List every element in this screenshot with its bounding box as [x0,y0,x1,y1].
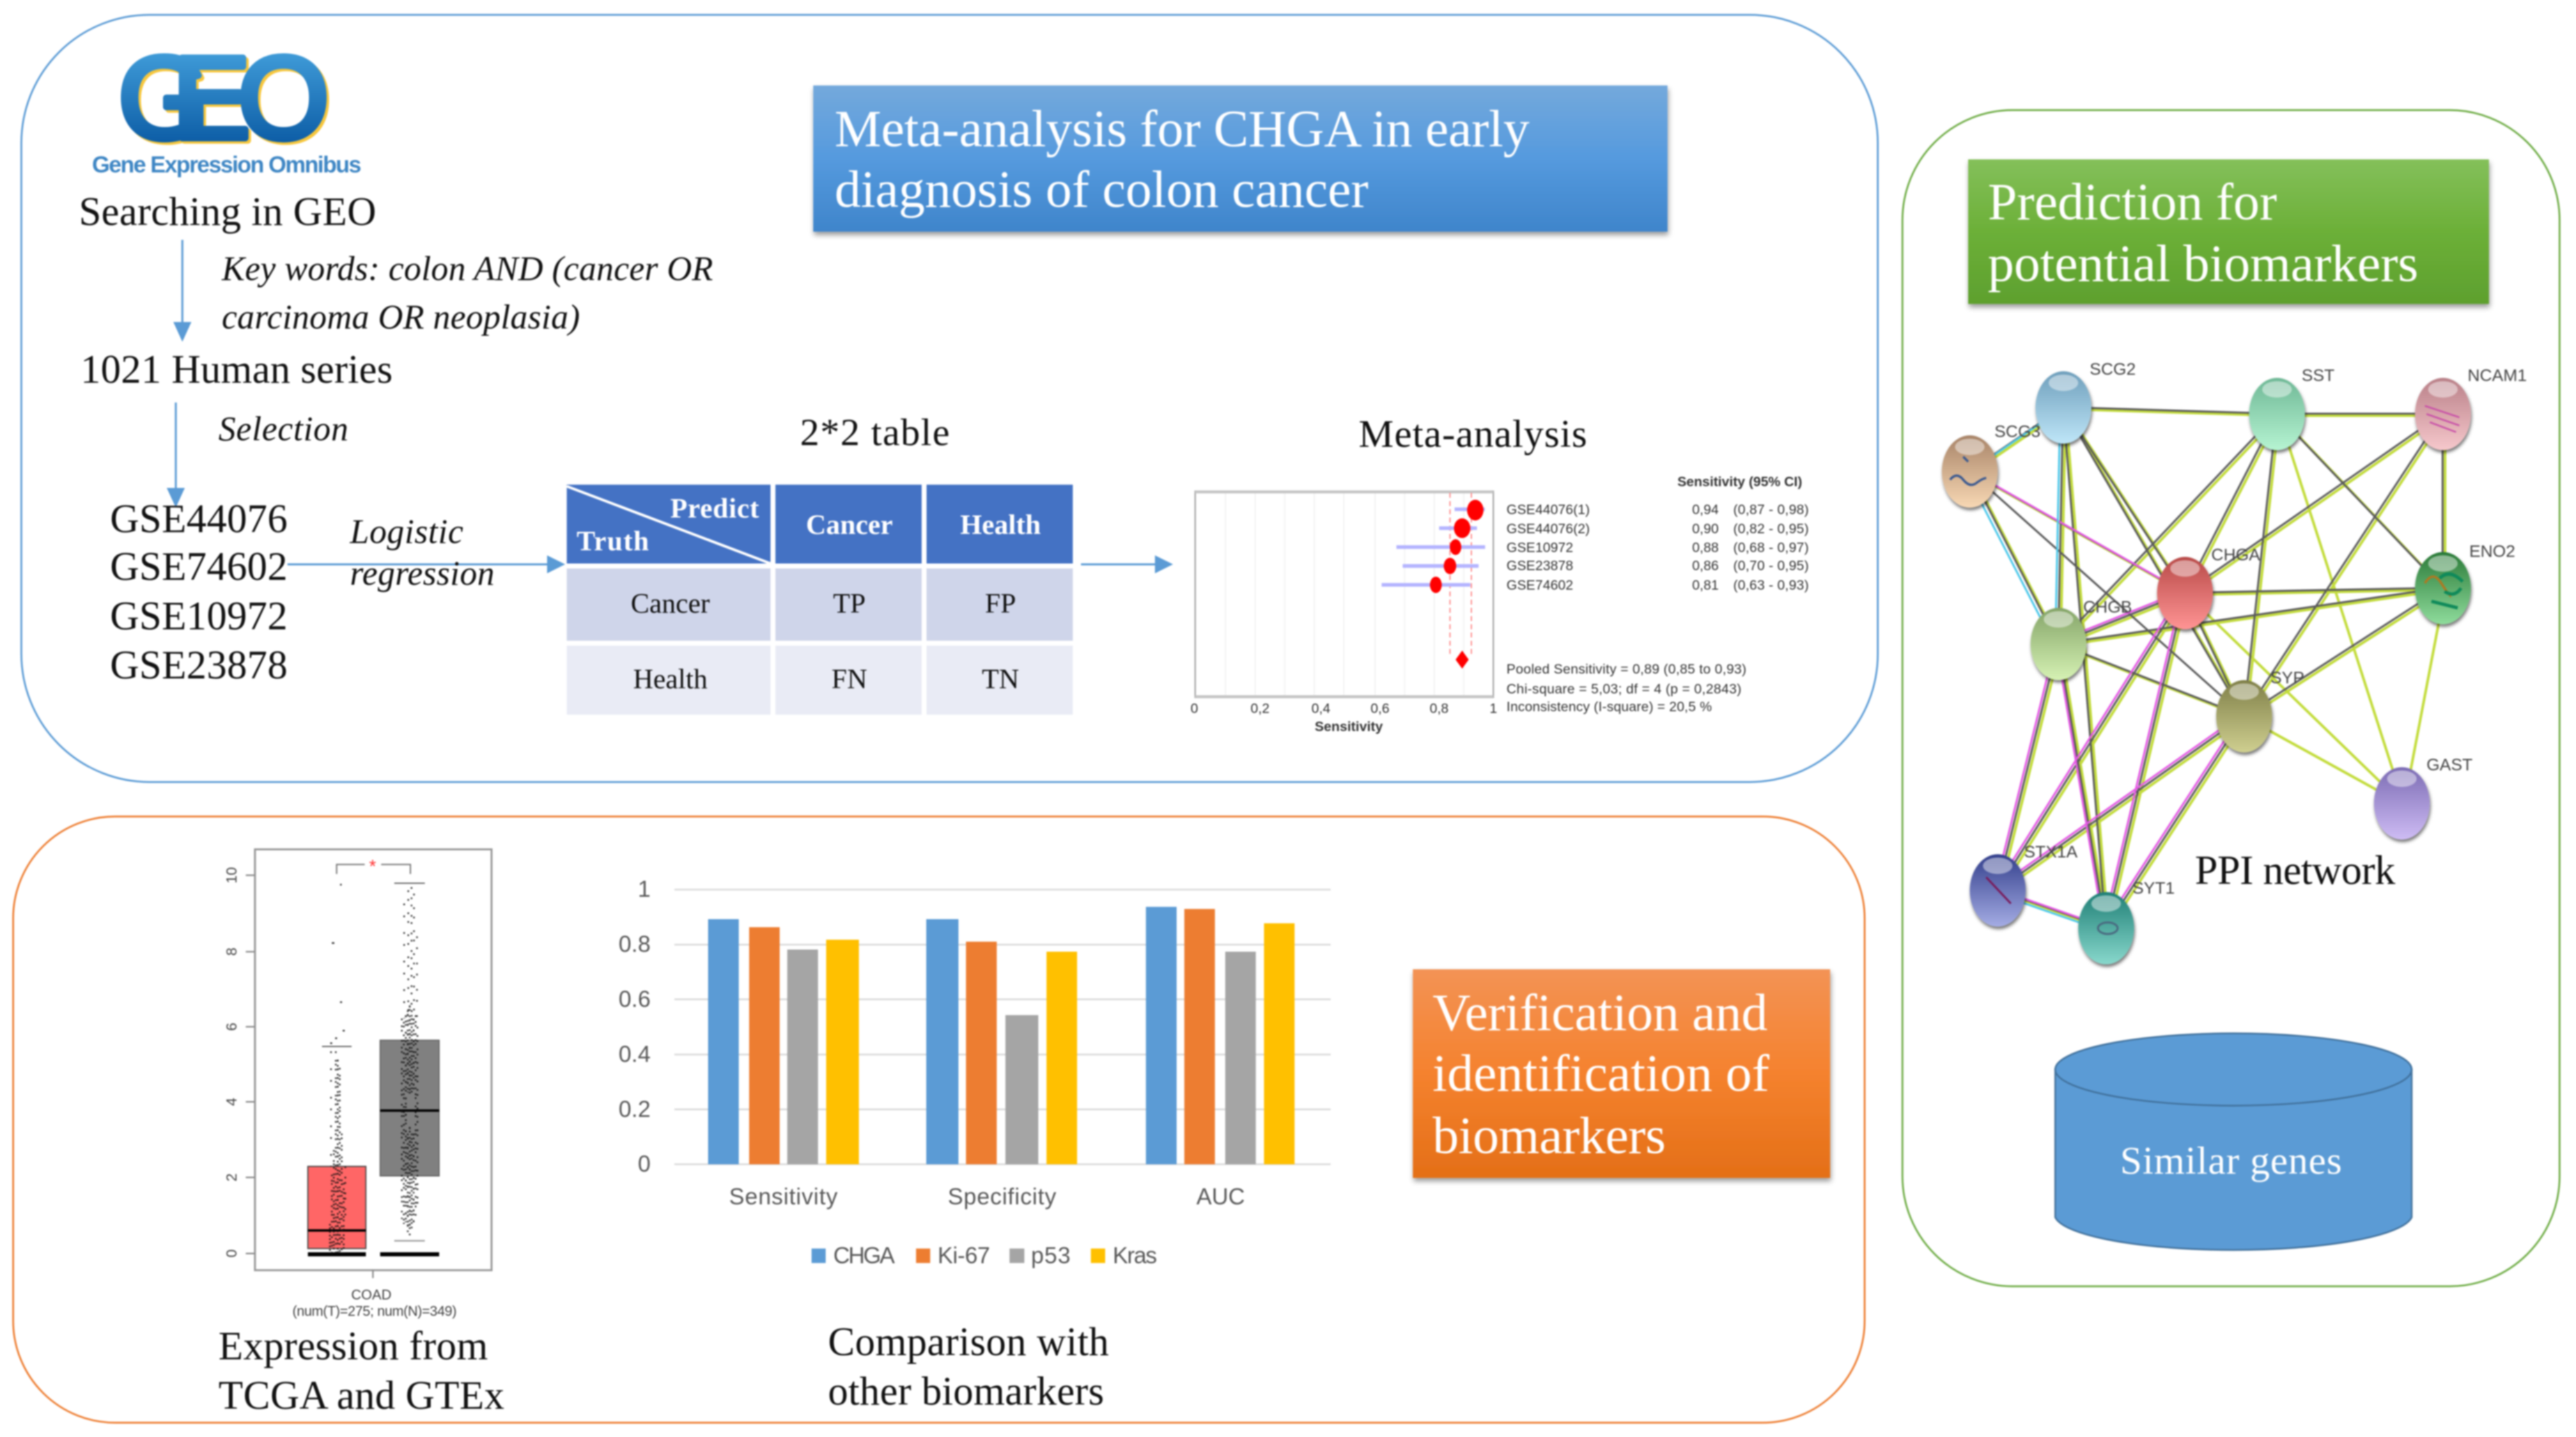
text: key words: Key words: colon AND (cancer OR [221,249,713,288]
chart: biomarker comparison bars: 0.6 [619,986,651,1011]
chart: biomarker comparison bars: 0 [638,1151,651,1176]
chart: forest plot: 0,4 [1312,701,1330,717]
chart: forest plot: (0,68 - 0,97) [1733,540,1809,555]
chart: PPI network [1942,360,2527,964]
chart: forest plot: Inconsistency (I-square) = 20,5 % [1507,699,1712,715]
panel outline: verification [13,816,1865,1422]
text: searching in GEO: Searching in GEO [79,190,376,234]
chart: forest plot: Sensitivity (95% CI) [1677,474,1802,490]
chart: PPI network: SCG2 [2090,360,2136,379]
text: GSE datasets [110,497,288,688]
title: meta-analysis [813,86,1668,232]
table: 2 by 2: Cancer [806,509,893,541]
chart: biomarker comparison bars: Sensitivity [729,1183,838,1209]
chart: biomarker comparison bars: CHGA [833,1243,895,1268]
text: PPI network: PPI network [2195,847,2396,893]
icon: similar genes cylinder: Similar genes [2120,1140,2342,1183]
chart: forest plot: 1 [1489,701,1497,717]
panel: meta-analysis [22,15,1878,782]
title: meta-analysis: diagnosis of colon cancer [835,161,1369,219]
title: verification: Verification and [1433,984,1768,1042]
chart: biomarker comparison bars: Specificity [948,1183,1057,1209]
panel outline: meta-analysis [22,15,1878,782]
logo: GEO: GEO [121,36,332,166]
chart: biomarker comparison bars: AUC [1196,1183,1245,1209]
table: 2 by 2: Truth [577,525,649,557]
chart: biomarker comparison bars: p53 [1031,1243,1071,1268]
text: GSE datasets: GSE10972 [110,594,288,638]
chart: forest plot: GSE74602 [1507,578,1573,593]
table: 2 by 2: Cancer [630,588,710,619]
chart: forest plot: 0 [1190,701,1198,717]
chart: PPI network: SYP [2270,669,2304,688]
chart: expression box plot: (num(T)=275; num(N)=349) [293,1304,457,1319]
chart: forest plot: (0,82 - 0,95) [1733,521,1809,536]
text: logistic regression: regression [350,554,495,593]
panel outline: prediction [1902,110,2559,1287]
title: verification: biomarkers [1433,1108,1666,1165]
chart: PPI network: NCAM1 [2467,366,2527,385]
arrow: search to series [173,240,192,342]
chart: biomarker comparison bars: 0.2 [619,1096,651,1121]
chart: biomarker comparison bars: 0.4 [619,1041,651,1067]
chart: PPI network: STX1A [2024,843,2078,862]
panel: verification [13,816,1865,1422]
chart: biomarker comparison bars [619,876,1330,1268]
text: comparison caption [828,1321,1109,1413]
chart: PPI network: ENO2 [2469,543,2515,561]
chart: PPI network: CHGA [2211,545,2260,564]
heading: meta-analysis: Meta-analysis [1358,413,1587,456]
arrow: series to datasets [166,403,185,508]
title: prediction [1968,160,2489,304]
chart: forest plot: Pooled Sensitivity = 0,89 (0,85 to 0,93) [1507,662,1746,677]
chart: forest plot: Sensitivity [1314,720,1383,735]
text: key words: carcinoma OR neoplasia) [222,298,580,336]
chart: PPI network: GAST [2426,756,2473,775]
chart: forest plot: 0,90 [1692,521,1718,536]
logo: GEO: GEO [118,33,329,163]
chart: forest plot: 0,8 [1429,701,1449,717]
chart: forest plot: (0,70 - 0,95) [1733,558,1809,573]
title: prediction: potential biomarkers [1988,235,2419,293]
chart: forest plot: 0,6 [1370,701,1390,717]
text: expression caption [219,1325,504,1417]
text: logistic regression: Logistic [349,513,463,551]
text: expression caption: TCGA and GTEx [219,1374,504,1417]
text: GSE datasets: GSE23878 [110,644,288,688]
table: 2 by 2: Health [960,509,1041,541]
chart: expression box plot: 0 [224,1250,240,1257]
text: human series: 1021 Human series [81,348,393,392]
chart: forest plot: 0,81 [1692,578,1718,593]
chart: PPI network: SYT1 [2132,879,2175,898]
text: expression caption: Expression from [219,1325,488,1369]
logo: GEO: Gene Expression Omnibus [92,152,362,178]
table: 2 by 2 [567,485,1073,715]
chart: forest plot [1190,474,1809,735]
chart: forest plot: (0,87 - 0,98) [1733,502,1809,518]
panel: prediction [1902,110,2559,1287]
chart: expression box plot: 6 [224,1023,240,1031]
chart: forest plot: 0,86 [1692,558,1718,573]
table: 2 by 2: Health [633,663,708,694]
chart: biomarker comparison bars: 1 [638,876,651,902]
chart: forest plot: 0,88 [1692,540,1718,555]
arrow: table to forest plot [1081,555,1173,573]
text: logistic regression [349,513,495,593]
heading: 2*2 table: 2*2 table [800,411,949,453]
text: key words [221,249,713,336]
text: comparison caption: Comparison with [828,1321,1109,1365]
title: verification: identification of [1433,1045,1770,1103]
icon: similar genes cylinder [2055,1033,2412,1250]
chart: biomarker comparison bars: Ki-67 [938,1243,990,1268]
table: 2 by 2: TP [833,588,866,619]
title: prediction: Prediction for [1988,173,2277,231]
text: GSE datasets: GSE74602 [110,545,288,589]
text: selection: Selection [219,410,348,448]
title: verification [1413,970,1830,1178]
chart: forest plot: 0,94 [1692,502,1718,518]
table: 2 by 2: FN [832,663,867,694]
text: comparison caption: other biomarkers [828,1369,1104,1413]
chart: PPI network: SCG3 [1994,422,2040,441]
chart: forest plot: GSE44076(2) [1507,521,1590,536]
chart: forest plot: GSE23878 [1507,558,1574,573]
chart: expression box plot: 8 [224,947,240,956]
chart: expression box plot: 10 [224,867,240,883]
chart: expression box plot [224,849,492,1319]
table: 2 by 2: FP [985,588,1016,619]
chart: PPI network: CHGB [2083,598,2132,617]
chart: biomarker comparison bars: 0.8 [619,931,651,957]
chart: biomarker comparison bars: Kras [1112,1243,1157,1268]
table: 2 by 2: TN [982,663,1019,694]
text: GSE datasets: GSE44076 [110,497,288,541]
chart: forest plot: (0,63 - 0,93) [1733,578,1809,593]
chart: forest plot: GSE10972 [1507,540,1573,555]
chart: forest plot: 0,2 [1250,701,1270,717]
chart: expression box plot: COAD [351,1288,391,1303]
table: 2 by 2: Predict [670,492,759,524]
chart: forest plot: Chi-square = 5,03; df = 4 (p = 0,2843) [1507,681,1741,697]
chart: expression box plot: 4 [224,1098,240,1106]
chart: forest plot: GSE44076(1) [1507,502,1590,518]
chart: PPI network: SST [2302,366,2335,385]
arrow: datasets to table [288,555,565,573]
chart: expression box plot: 2 [224,1173,240,1181]
chart: expression box plot: * [369,857,376,876]
title: meta-analysis: Meta-analysis for CHGA in early [835,100,1530,158]
